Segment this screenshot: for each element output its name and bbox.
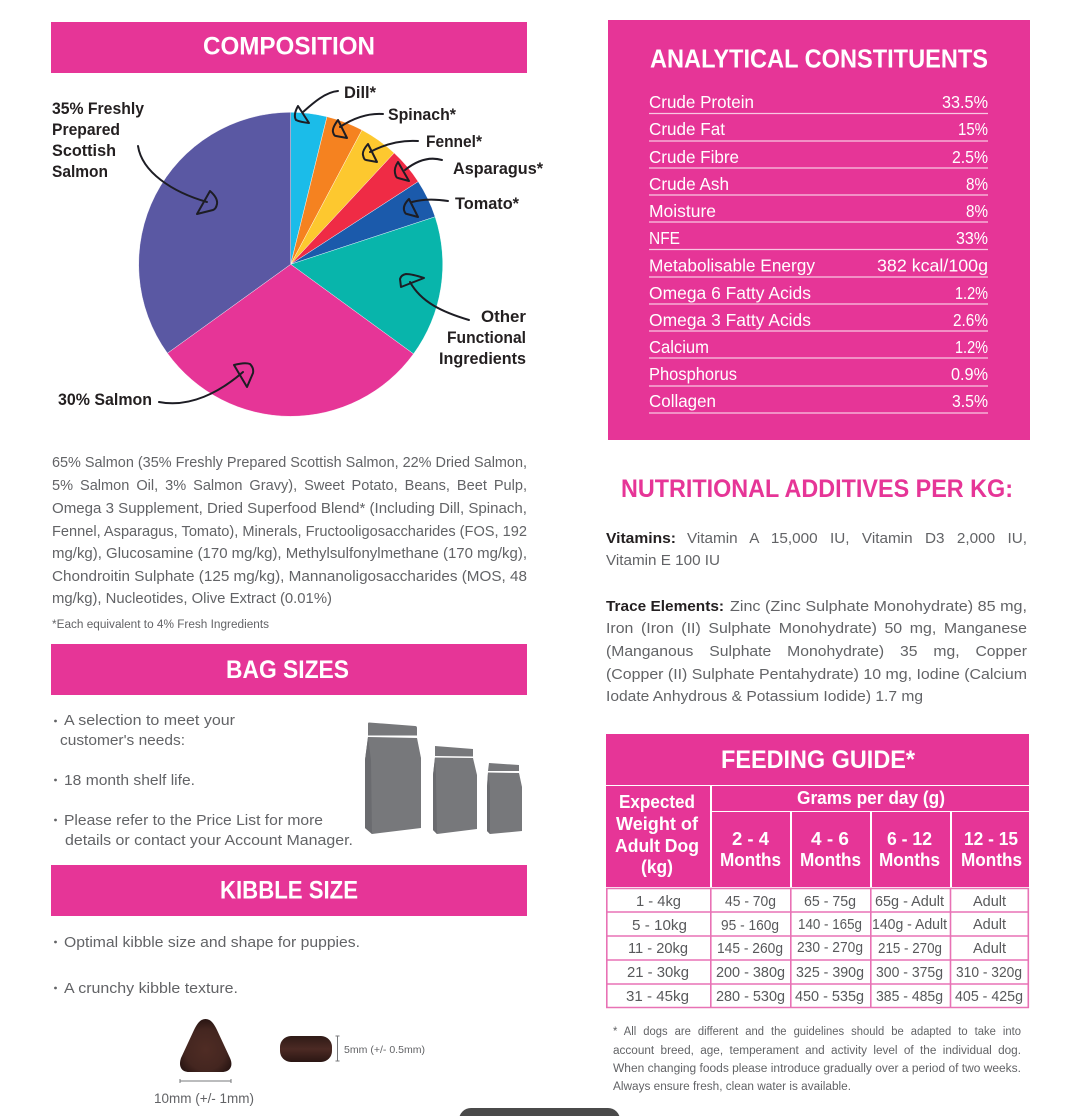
column header: 4 to 6 months: Months bbox=[800, 850, 861, 870]
footnote: feeding guidance bbox=[613, 1026, 1021, 1093]
column: weight bbox=[626, 893, 689, 1005]
callout: 35% freshly prepared scottish salmon: Salmon bbox=[52, 162, 108, 181]
column: 2 to 4 months values: 200 - 380g bbox=[716, 964, 785, 981]
heading: nutritional additives per kg: NUTRITIONAL ADDITIVES PER KG: bbox=[621, 475, 1013, 503]
text block: trace elements: Iron (Iron (II) Sulphate Monohydrate) 50 mg, Manganese bbox=[606, 620, 1027, 637]
text block: ingredients list: 65% Salmon (35% Freshly Prepared Scottish Salmon, 22% Dried Salmon, bbox=[52, 454, 527, 471]
callout: 35% freshly prepared scottish salmon: 35% Freshly bbox=[52, 99, 144, 118]
callout: 30% salmon bbox=[58, 363, 253, 409]
column header: expected weight: Expected bbox=[619, 792, 695, 812]
row values: 15% bbox=[958, 119, 988, 139]
column: 4 to 6 months values: 230 - 270g bbox=[797, 939, 863, 956]
column header: expected weight: Adult Dog bbox=[615, 836, 699, 856]
footnote: feeding guidance: account breed, age, temperament and activity level of the individual dog. bbox=[613, 1045, 1021, 1057]
callout: tomato bbox=[404, 194, 519, 217]
row values: 1.2% bbox=[955, 283, 988, 303]
callout: 35% freshly prepared scottish salmon bbox=[52, 99, 217, 214]
column: 4 to 6 months values bbox=[795, 893, 864, 1005]
column: 2 to 4 months values: 95 - 160g bbox=[721, 917, 779, 934]
row values: 33.5% bbox=[942, 92, 988, 112]
row values: 382 kcal/100g bbox=[877, 256, 988, 276]
callout: other functional ingredients: Functional bbox=[447, 328, 526, 347]
column: 2 to 4 months values: 145 - 260g bbox=[717, 940, 783, 957]
column header: 2 to 4 months: Months bbox=[720, 850, 781, 870]
icon: triangular kibble with width dimension: 10mm (+/- 1mm) bbox=[154, 1090, 254, 1106]
column: 6 to 12 months values bbox=[872, 893, 948, 1005]
text block: vitamins: Vitamin A 15,000 IU, Vitamin D3 2,000 IU, bbox=[687, 530, 1027, 547]
text block: ingredients list: 5% Salmon Oil, 3% Salmon Gravy), Sweet Potato, Beans, Beet Pulp, bbox=[52, 477, 527, 494]
column: 6 to 12 months values: 300 - 375g bbox=[876, 964, 943, 981]
text block: bag size bullets: 18 month shelf life. bbox=[64, 772, 195, 789]
column header: 2 to 4 months bbox=[712, 812, 790, 887]
row labels: Moisture bbox=[649, 201, 716, 221]
row values: 1.2% bbox=[955, 337, 988, 357]
column: 2 to 4 months values bbox=[716, 893, 785, 1005]
row values bbox=[877, 92, 988, 411]
column: 12 to 15 months values: Adult bbox=[973, 916, 1007, 933]
row lines bbox=[649, 114, 988, 413]
row values: 3.5% bbox=[952, 391, 988, 411]
callout: other functional ingredients: Other bbox=[481, 307, 526, 326]
text block: vitamins bbox=[606, 530, 1027, 569]
column header: 12 to 15 months bbox=[952, 812, 1029, 887]
column header: 4 to 6 months: 4 - 6 bbox=[811, 829, 849, 849]
text block: kibble bullets: Optimal kibble size and shape for puppies. bbox=[64, 934, 360, 951]
column: weight: 1 - 4kg bbox=[636, 893, 681, 910]
text block: vitamins: Vitamins: bbox=[606, 530, 676, 547]
callout: 35% freshly prepared scottish salmon: Prepared bbox=[52, 120, 120, 139]
row labels: Omega 3 Fatty Acids bbox=[649, 310, 811, 330]
row labels: Calcium bbox=[649, 337, 709, 357]
text block: bag size bullets: customer's needs: bbox=[60, 732, 185, 749]
column: 4 to 6 months values: 450 - 535g bbox=[795, 988, 864, 1005]
footnote: feeding guidance: Always ensure fresh, clean water is available. bbox=[613, 1081, 851, 1093]
column: 4 to 6 months values: 325 - 390g bbox=[796, 964, 864, 981]
callout: asparagus: Asparagus* bbox=[453, 159, 543, 178]
column header: grams per day bbox=[712, 786, 1029, 811]
text block: trace elements: (Manganous Sulphate Monohydrate) 35 mg, Copper bbox=[606, 643, 1027, 660]
column header: 12 to 15 months: 12 - 15 bbox=[964, 829, 1018, 849]
row values: 33% bbox=[956, 228, 988, 248]
pie chart: composition bbox=[139, 112, 443, 416]
column: weight: 5 - 10kg bbox=[632, 917, 687, 934]
column: weight: 21 - 30kg bbox=[627, 964, 689, 981]
heading: composition: COMPOSITION bbox=[203, 32, 375, 60]
column: 12 to 15 months values: 405 - 425g bbox=[955, 988, 1023, 1005]
text block: bag size bullets: A selection to meet your bbox=[64, 712, 235, 729]
heading: bag sizes bbox=[51, 644, 527, 695]
text block: ingredients list bbox=[52, 454, 527, 607]
column: 2 to 4 months values: 280 - 530g bbox=[716, 988, 785, 1005]
column header: expected weight: (kg) bbox=[641, 857, 673, 877]
footnote: feeding guidance: * All dogs are different and the guidelines should be adapted to take into bbox=[613, 1026, 1021, 1038]
panel heading: ANALYTICAL CONSTITUENTS bbox=[650, 44, 988, 74]
table title bbox=[606, 734, 1029, 785]
icon: three product bags bbox=[365, 722, 522, 834]
text block: bag size bullets: details or contact your Account Manager. bbox=[65, 832, 353, 849]
column header: 2 to 4 months: 2 - 4 bbox=[732, 829, 769, 849]
row labels: Metabolisable Energy bbox=[649, 256, 815, 276]
callout: fennel bbox=[363, 132, 482, 162]
table: feeding guide bbox=[606, 734, 1029, 1008]
icon: side view kibble with height dimension: 5mm (+/- 0.5mm) bbox=[344, 1044, 425, 1056]
column: 12 to 15 months values: Adult bbox=[973, 893, 1007, 910]
text block: bag size bullets: Please refer to the Price List for more bbox=[64, 812, 323, 829]
row values: 2.5% bbox=[952, 147, 988, 167]
heading: composition bbox=[51, 22, 527, 73]
row values: 8% bbox=[966, 201, 988, 221]
row labels: Crude Fibre bbox=[649, 147, 739, 167]
text block: vitamins: Vitamin E 100 IU bbox=[606, 552, 720, 569]
column: 4 to 6 months values: 65 - 75g bbox=[804, 893, 856, 910]
row labels: Crude Fat bbox=[649, 119, 725, 139]
callout: spinach: Spinach* bbox=[388, 105, 456, 124]
column header: 6 to 12 months: 6 - 12 bbox=[887, 829, 932, 849]
text block: trace elements: (Copper (II) Sulphate Pentahydrate) 10 mg, Iodine (Calcium bbox=[606, 666, 1027, 683]
callout: fennel: Fennel* bbox=[426, 132, 482, 151]
column: 12 to 15 months values: 310 - 320g bbox=[956, 964, 1022, 981]
dark tab at bottom edge bbox=[459, 1108, 620, 1116]
callout: 30% salmon: 30% Salmon bbox=[58, 390, 152, 409]
row labels: Collagen bbox=[649, 391, 716, 411]
callout: spinach bbox=[333, 105, 456, 138]
column header: grams per day: Grams per day (g) bbox=[797, 788, 945, 808]
heading: kibble size bbox=[51, 865, 527, 916]
column: 6 to 12 months values: 140g - Adult bbox=[872, 916, 948, 933]
column header: expected weight: Weight of bbox=[616, 814, 699, 834]
column header: 6 to 12 months: Months bbox=[879, 850, 940, 870]
column header: 12 to 15 months: Months bbox=[961, 850, 1022, 870]
table grid bbox=[606, 888, 1029, 1008]
row values: 8% bbox=[966, 174, 988, 194]
text block: ingredients list: Fennel, Asparagus, Tomato), Minerals, Fructooligosaccharides (FOS, 192 bbox=[52, 523, 527, 540]
callout: other functional ingredients bbox=[400, 274, 526, 368]
row values: 0.9% bbox=[951, 364, 988, 384]
heading: kibble size: KIBBLE SIZE bbox=[220, 876, 358, 904]
icon: side view kibble with height dimension bbox=[280, 1036, 425, 1062]
footnote: feeding guidance: When changing foods please introduce gradually over a period of two weeks. bbox=[613, 1063, 1021, 1075]
text block: trace elements: Zinc (Zinc Sulphate Monohydrate) 85 mg, bbox=[730, 598, 1027, 615]
callout: dill: Dill* bbox=[344, 83, 376, 102]
callout: asparagus bbox=[395, 159, 543, 181]
column header: expected weight bbox=[606, 786, 710, 887]
text block: ingredients list: mg/kg), Glucosamine (170 mg/kg), Methylsulfonylmethane (170 mg/kg), bbox=[52, 545, 527, 562]
column header: 6 to 12 months bbox=[872, 812, 950, 887]
row labels: Crude Protein bbox=[649, 92, 754, 112]
column: weight: 31 - 45kg bbox=[626, 988, 689, 1005]
row labels bbox=[649, 92, 815, 411]
row labels: Crude Ash bbox=[649, 174, 729, 194]
heading: bag sizes: BAG SIZES bbox=[226, 656, 349, 684]
column: 2 to 4 months values: 45 - 70g bbox=[725, 893, 776, 910]
footnote: fresh ingredients equivalent: *Each equivalent to 4% Fresh Ingredients bbox=[52, 619, 269, 631]
callout: dill bbox=[295, 83, 376, 123]
text block: ingredients list: Omega 3 Supplement, Dried Superfood Blend* (Including Dill, Spinach, bbox=[52, 500, 527, 517]
row labels: NFE bbox=[649, 228, 680, 248]
column: 12 to 15 months values: Adult bbox=[973, 940, 1007, 957]
text block: trace elements: Iodate Anhydrous & Potassium Iodide) 1.7 mg bbox=[606, 688, 923, 705]
column: weight: 11 - 20kg bbox=[628, 940, 688, 957]
text block: trace elements: Trace Elements: bbox=[606, 598, 724, 615]
text block: ingredients list: mg/kg), Nucleotides, Olive Extract (0.01%) bbox=[52, 590, 332, 607]
column header: 4 to 6 months bbox=[792, 812, 870, 887]
table title: FEEDING GUIDE* bbox=[721, 746, 915, 774]
panel: analytical constituents bbox=[608, 20, 1030, 440]
row labels: Omega 6 Fatty Acids bbox=[649, 283, 811, 303]
text block: ingredients list: Chondroitin Sulphate (125 mg/kg), Mannanoligosaccharides (MOS, 48 bbox=[52, 568, 527, 585]
text block: kibble bullets bbox=[54, 934, 360, 997]
row labels: Phosphorus bbox=[649, 364, 737, 384]
row values: 2.6% bbox=[953, 310, 988, 330]
column: 6 to 12 months values: 385 - 485g bbox=[876, 988, 943, 1005]
column: 12 to 15 months values bbox=[955, 893, 1023, 1005]
callout: other functional ingredients: Ingredients bbox=[439, 349, 526, 368]
column: 4 to 6 months values: 140 - 165g bbox=[798, 916, 862, 933]
text block: bag size bullets bbox=[54, 712, 353, 849]
column: 6 to 12 months values: 215 - 270g bbox=[878, 940, 942, 957]
callout: 35% freshly prepared scottish salmon: Scottish bbox=[52, 141, 116, 160]
column: 6 to 12 months values: 65g - Adult bbox=[875, 893, 945, 910]
icon: triangular kibble with width dimension bbox=[154, 1019, 254, 1106]
text block: kibble bullets: A crunchy kibble texture. bbox=[64, 980, 238, 997]
text block: trace elements bbox=[606, 598, 1027, 705]
callout: tomato: Tomato* bbox=[455, 194, 519, 213]
